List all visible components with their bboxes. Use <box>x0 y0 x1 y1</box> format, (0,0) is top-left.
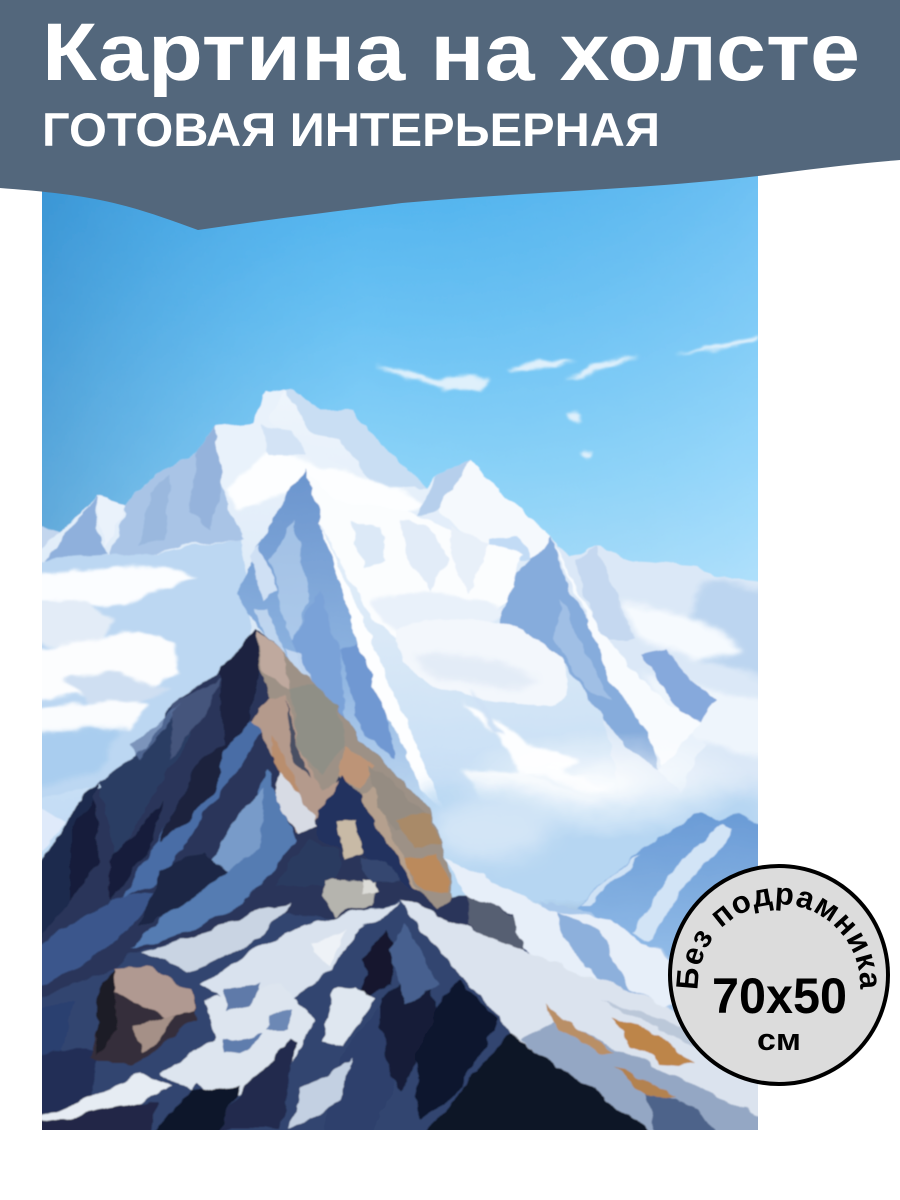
central white snow field <box>306 467 520 640</box>
unit: см <box>757 1022 801 1057</box>
ridge white stripe <box>320 523 445 810</box>
dark wedge under slope <box>426 1033 648 1130</box>
distant right ridge <box>550 537 758 824</box>
sky <box>42 176 758 564</box>
white wind-blown snow <box>462 692 580 796</box>
left small peaks <box>42 494 118 562</box>
slope base behind badge <box>540 900 770 1100</box>
left distant slope <box>30 800 65 870</box>
badge circle <box>670 866 888 1084</box>
lower valley haze <box>420 736 758 910</box>
second peak <box>415 462 552 560</box>
right blue mountain <box>577 812 770 1000</box>
tan rock ridge <box>251 630 453 910</box>
snow patch and inner rock face <box>275 772 418 915</box>
header banner <box>0 0 900 230</box>
wispy clouds <box>373 336 758 458</box>
curved text: without stretcher: Без подрамника <box>676 888 877 990</box>
main snow massif <box>42 388 612 862</box>
small dark rocks at ridge foot <box>465 898 522 950</box>
valley snow fields left <box>30 540 250 800</box>
title: Картина на холсте <box>42 7 860 98</box>
foreground dark mountain <box>42 628 524 986</box>
main peak shadows <box>110 390 426 560</box>
size badge <box>668 864 890 1086</box>
subtitle: ГОТОВАЯ ИНТЕРЬЕРНАЯ <box>42 103 660 156</box>
snow puff cloud <box>395 619 567 707</box>
snowy middle slope <box>444 858 672 1008</box>
front ridge shadow side <box>237 467 425 800</box>
white snow slope with orange lichen <box>400 900 770 1140</box>
third peak <box>500 537 717 790</box>
painting: snowy mountain peaks under a blue sky <box>30 165 770 1140</box>
size number: 70x50 <box>712 968 847 1024</box>
boulder <box>90 965 198 1067</box>
snow-covered front hill <box>42 900 510 1130</box>
